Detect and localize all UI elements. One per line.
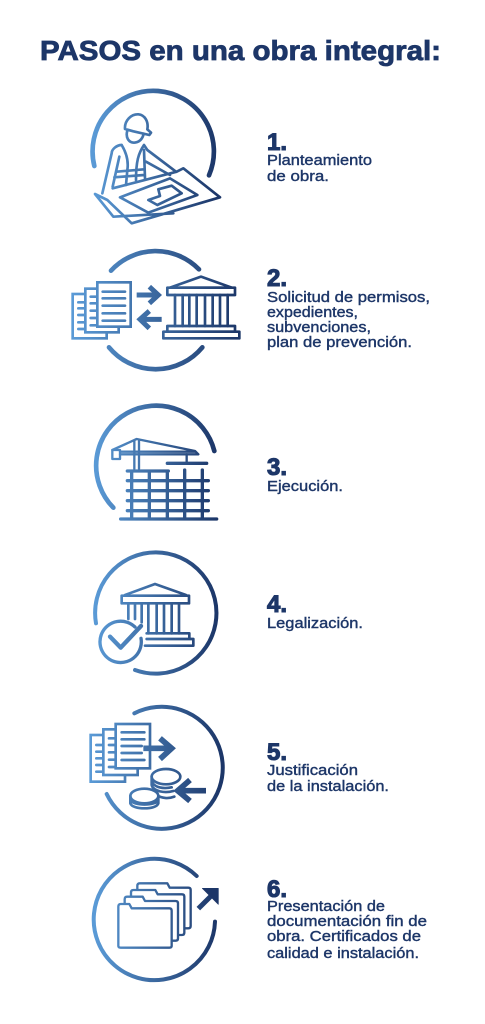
step 2 text: subvenciones, [267, 319, 371, 336]
icon: institution with check mark [95, 552, 216, 674]
icon: crane and building [96, 406, 217, 519]
icon: documents and institution exchange [73, 251, 239, 369]
icon: folders with arrow [94, 859, 218, 980]
step 2 text: 2. [267, 265, 287, 292]
step 3 text: Ejecución. [267, 478, 343, 495]
step 5 text [267, 739, 389, 795]
step 6 text [267, 876, 427, 962]
step 1 text: 1. [267, 129, 287, 156]
step 6 text: obra. Certificados de [267, 928, 421, 945]
step 4 text: Legalización. [267, 615, 363, 632]
step 4 text: 4. [267, 591, 287, 618]
step 6 text: calidad e instalación. [267, 945, 419, 962]
step 3 text [267, 454, 343, 495]
step 5 text: Justificación [267, 762, 358, 779]
step 1 text: de obra. [267, 168, 329, 185]
step 1 text [267, 129, 372, 185]
step 2 text [267, 265, 430, 351]
step 1 text: Planteamiento [267, 152, 372, 169]
step 6 text: Presentación de [267, 898, 385, 915]
step 6 text: documentación fin de [267, 913, 427, 930]
icon: documents and coins [91, 707, 223, 829]
step 2 text: Solicitud de permisos, [267, 289, 430, 306]
step 3 text: 3. [267, 454, 287, 481]
step 5 text: de la instalación. [267, 778, 389, 795]
title: PASOS en una obra integral: [40, 35, 441, 66]
step 5 text: 5. [267, 739, 287, 766]
step 2 text: expedientes, [267, 304, 358, 321]
step 4 text [267, 591, 363, 632]
step 2 text: plan de prevención. [267, 334, 412, 351]
step 6 text: 6. [267, 876, 287, 903]
icon: worker with plans [93, 91, 220, 223]
